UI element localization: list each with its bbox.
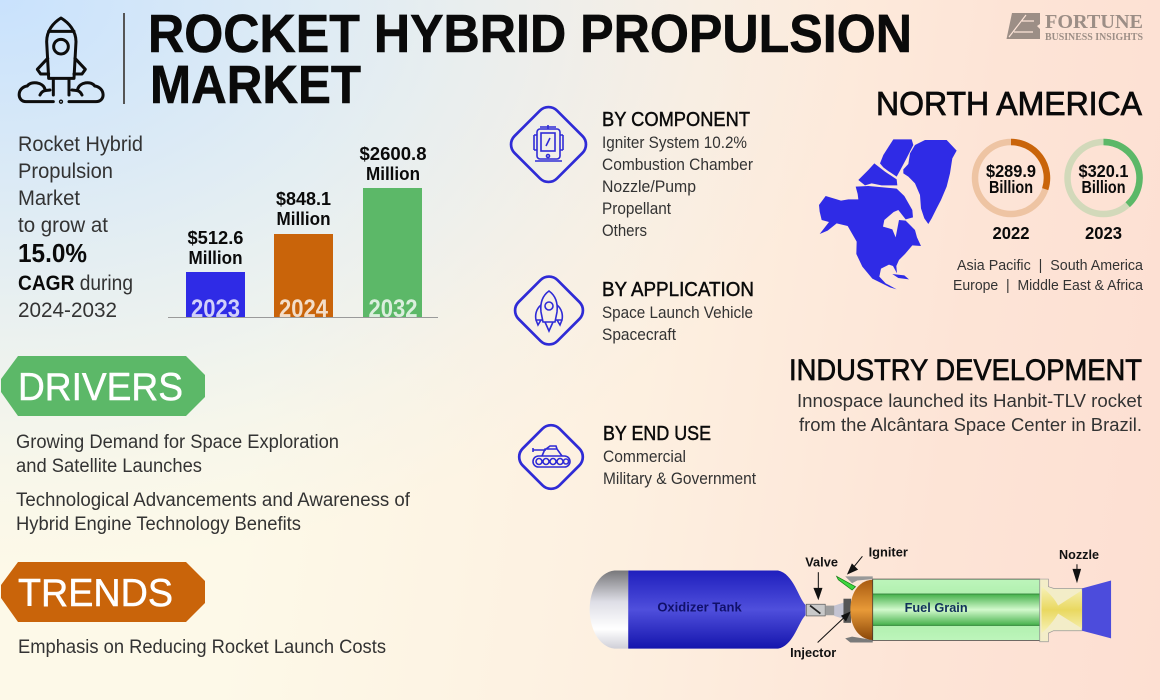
bar: 2024: [274, 188, 333, 323]
combustion dome: [850, 580, 873, 640]
logo: Fortune Business Insights: BUSINESS INSIGHTS: [1045, 32, 1143, 43]
bar: 2023: Million: [188, 247, 242, 268]
text block: by component: Nozzle/Pump: [602, 178, 696, 196]
fuel grain: [873, 579, 1040, 640]
title: [148, 4, 912, 115]
text block: CAGR summary: Propulsion: [18, 160, 113, 183]
nozzle: [1040, 579, 1111, 642]
donut chart: 2023: Billion: [1082, 177, 1126, 197]
text block: by end use: Military & Government: [603, 470, 756, 488]
icon: rocket launch logo: [19, 18, 103, 102]
text block: other regions: [953, 257, 1144, 294]
bar chart: market size: [168, 143, 438, 323]
logo: Fortune Business Insights: [1006, 11, 1143, 43]
map: North America: [819, 139, 957, 289]
bar: 2023: [186, 227, 245, 323]
text block: by application: Spacecraft: [602, 326, 676, 344]
bar: 2023: $512.6: [188, 227, 244, 248]
bar: 2024: 2024: [279, 295, 328, 323]
text block: CAGR summary: Rocket Hybrid: [18, 133, 143, 156]
text block: CAGR summary: 15.0%: [18, 238, 87, 268]
text block: by component: Propellant: [602, 200, 671, 218]
text block: by application: [602, 279, 754, 344]
text block: industry development: [797, 390, 1142, 435]
text block: by component: BY COMPONENT: [602, 109, 750, 131]
part labels and arrows: [790, 544, 1099, 660]
donut chart: 2022: [975, 142, 1047, 243]
donut chart: 2023: $320.1: [1078, 161, 1129, 181]
logo: Fortune Business Insights: FORTUNE: [1045, 11, 1143, 33]
title: ROCKET HYBRID PROPULSION: [148, 4, 912, 64]
bar: 2024: Million: [276, 208, 330, 229]
title: MARKET: [150, 55, 361, 115]
donut chart: 2023: 2023: [1085, 223, 1122, 243]
text block: other regions: Asia Pacific | South America: [957, 257, 1144, 274]
text block: CAGR summary: [18, 133, 143, 322]
text block: by end use: [603, 423, 756, 488]
text block: by end use: Commercial: [603, 448, 686, 466]
oxidizer tank: Oxidizer Tank: [657, 599, 742, 614]
panel: drivers heading: [1, 356, 205, 416]
text block: by component: [602, 109, 753, 240]
part labels and arrows: Valve: [805, 554, 838, 569]
text block: by application: Space Launch Vehicle: [602, 304, 753, 322]
valve and injector: [806, 576, 873, 642]
bar: 2032: 2032: [368, 295, 418, 323]
diagram: hybrid rocket engine: [590, 544, 1111, 660]
text block: by component: Combustion Chamber: [602, 156, 753, 174]
part labels and arrows: Igniter: [869, 544, 908, 559]
text block: industry development: from the Alcântara Space Center in Brazil.: [799, 414, 1142, 435]
text block: by application: BY APPLICATION: [602, 279, 754, 301]
heading: North America: NORTH AMERICA: [876, 85, 1142, 122]
donut chart: 2022: 2022: [992, 223, 1030, 243]
panel: drivers heading: DRIVERS: [18, 366, 183, 409]
text block: CAGR summary: Market: [18, 187, 80, 210]
text block: by component: Igniter System 10.2%: [602, 134, 747, 152]
bar: 2023: 2023: [191, 295, 240, 323]
donut chart: 2022: $289.9: [986, 161, 1036, 181]
part labels and arrows: Nozzle: [1059, 547, 1099, 562]
icon: end use tank: [514, 420, 588, 494]
donut chart: 2022: Billion: [989, 177, 1033, 197]
text block: CAGR summary: CAGR during: [18, 272, 133, 295]
text block: other regions: Europe | Middle East & Africa: [953, 277, 1144, 294]
text block: by component: Others: [602, 222, 647, 240]
text block: CAGR summary: 2024-2032: [18, 299, 117, 322]
fuel grain: Fuel Grain: [905, 600, 968, 615]
divider line beside title: [123, 13, 125, 104]
text block: trends list: Emphasis on Reducing Rocket Launch Costs: [18, 637, 386, 658]
text block: industry development: Innospace launched its Hanbit-TLV rocket: [797, 390, 1142, 411]
text block: drivers list: Hybrid Engine Technology Benefits: [16, 514, 301, 535]
bar: 2024: $848.1: [276, 188, 331, 209]
text block: drivers list: Growing Demand for Space Exploration: [16, 432, 339, 453]
bar: 2032: [360, 143, 426, 323]
text block: drivers list: Technological Advancements and Awareness of: [16, 490, 411, 511]
panel: trends heading: [1, 562, 205, 622]
bar: 2032: Million: [366, 163, 420, 184]
oxidizer tank: [590, 570, 806, 649]
icon: component engine: [506, 102, 591, 187]
text block: drivers list: and Satellite Launches: [16, 456, 202, 477]
part labels and arrows: Injector: [790, 645, 836, 660]
text block: CAGR summary: to grow at: [18, 214, 108, 237]
text block: drivers list: [16, 432, 411, 535]
donut chart: 2023: [1068, 142, 1140, 243]
text block: by end use: BY END USE: [603, 423, 711, 445]
panel: trends heading: TRENDS: [18, 572, 173, 615]
icon: application rocket: [510, 272, 588, 349]
bar: 2032: $2600.8: [360, 143, 426, 164]
